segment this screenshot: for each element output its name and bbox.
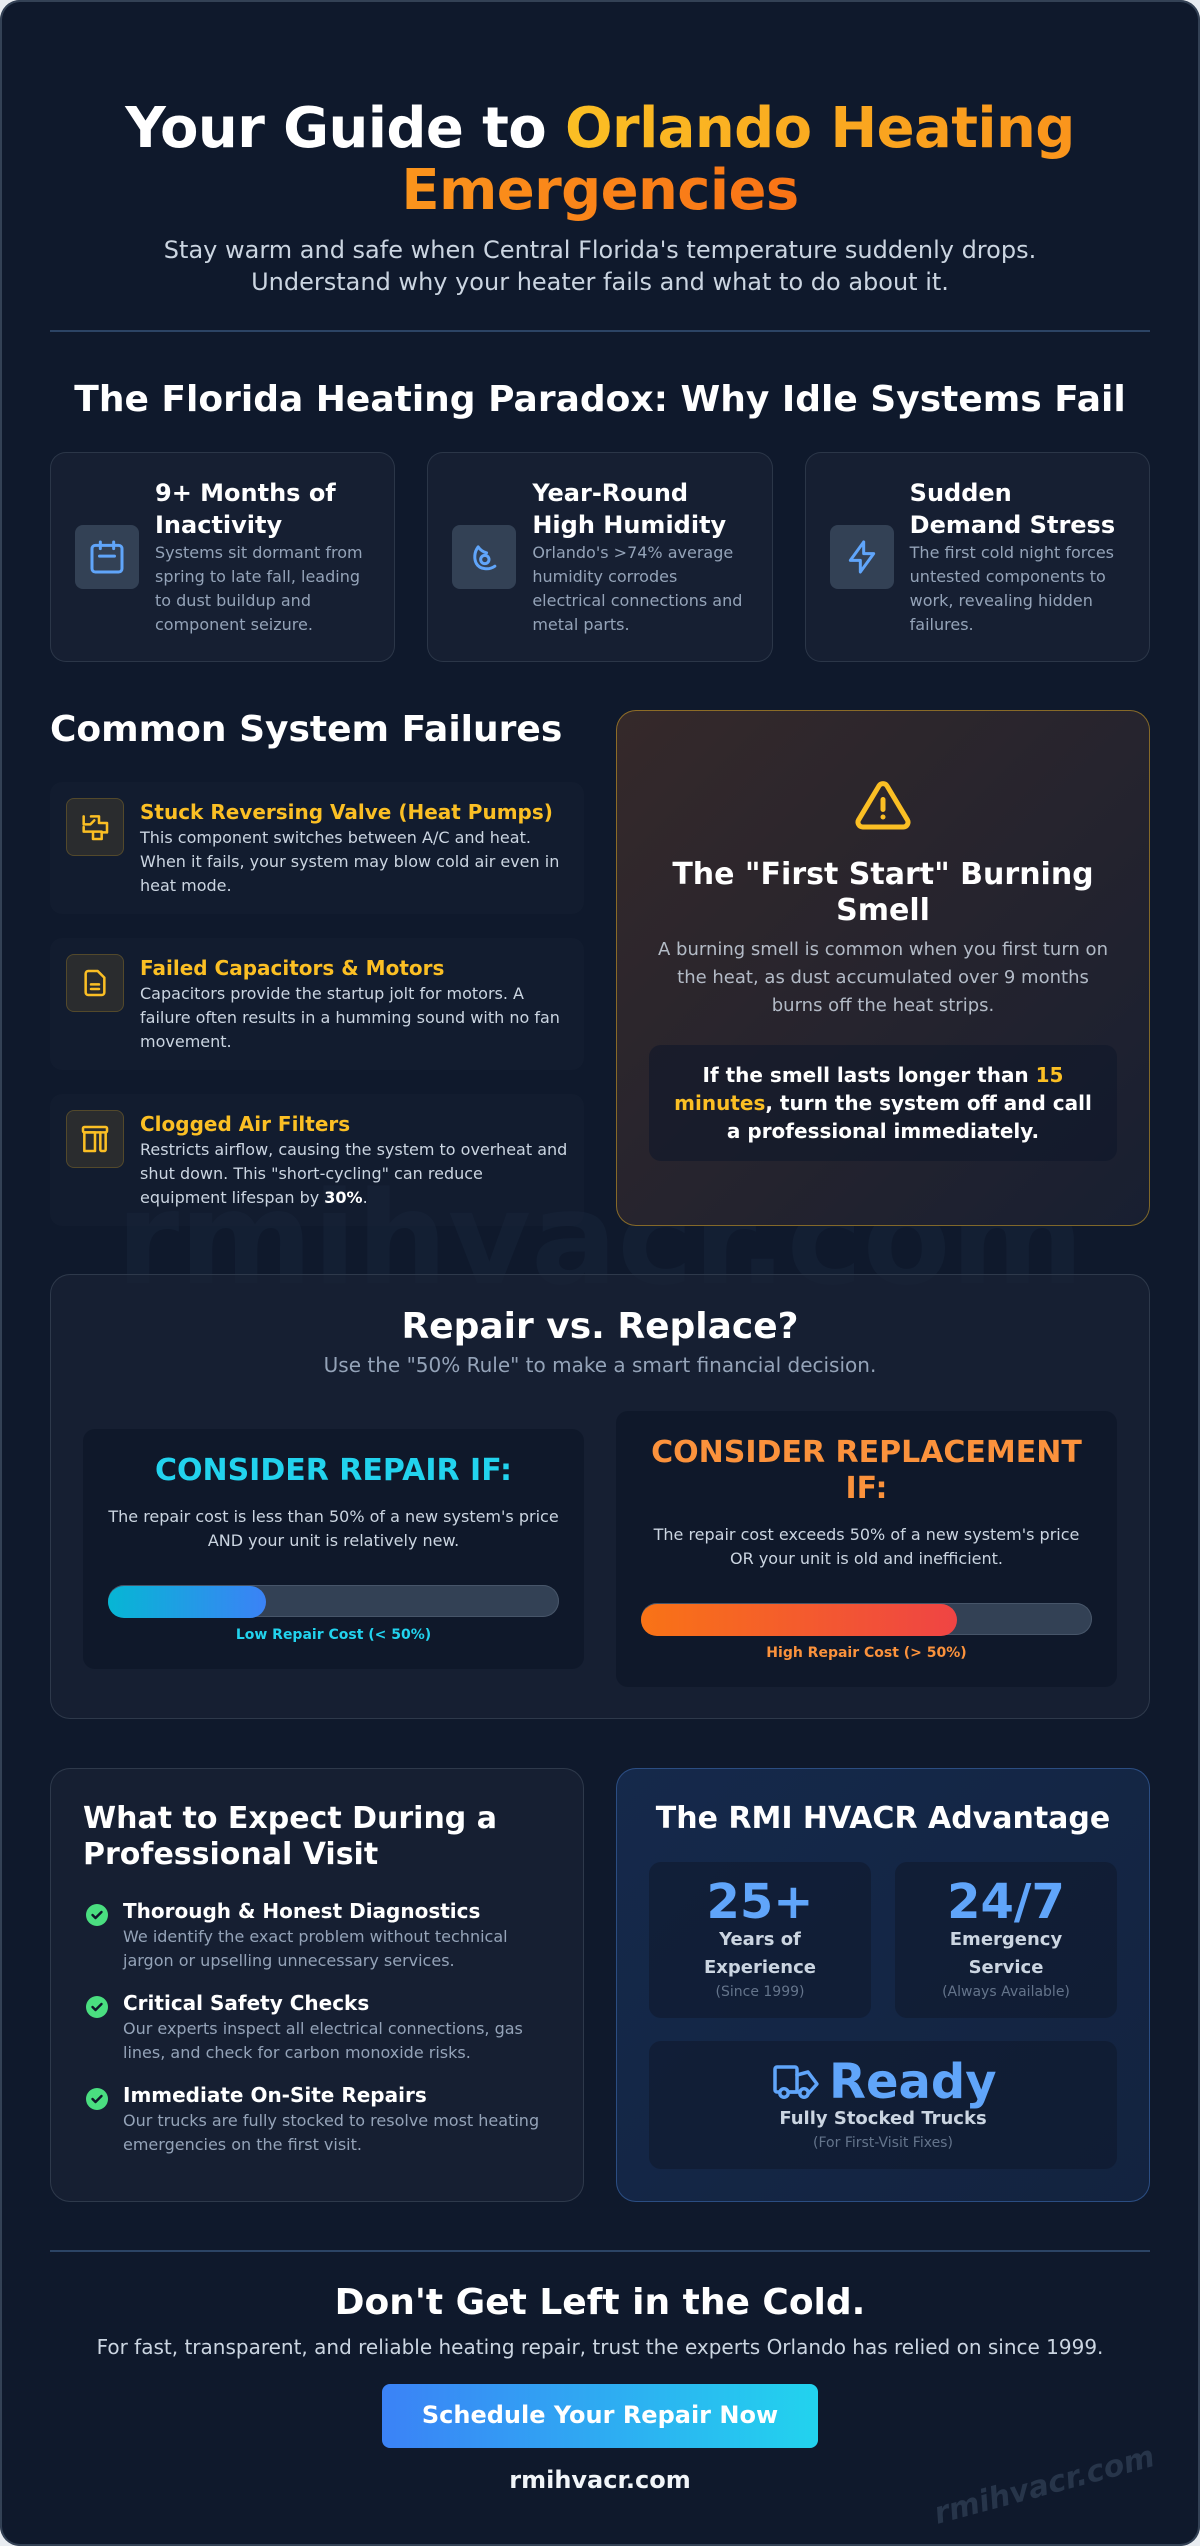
card title xyxy=(532,479,726,539)
item title: Stuck Reversing Valve (Heat Pumps) xyxy=(140,800,553,824)
check item 1 xyxy=(86,1899,508,1970)
column title: IF: xyxy=(845,1471,888,1506)
card text: metal parts. xyxy=(532,615,630,634)
item text: Capacitors provide the startup jolt for motors. A xyxy=(140,984,524,1003)
panel: repair vs replace xyxy=(50,1274,1150,1719)
item text: lines, and check for carbon monoxide risks. xyxy=(123,2043,471,2062)
subtitle: Understand why your heater fails and what to do about it. xyxy=(251,268,949,296)
icon: warning xyxy=(855,781,911,830)
item title: Immediate On-Site Repairs xyxy=(123,2083,427,2107)
label xyxy=(950,1929,1062,1978)
item text: Our experts inspect all electrical connections, gas xyxy=(123,2019,523,2038)
icon: check xyxy=(86,2088,108,2110)
card title: 9+ Months of xyxy=(155,479,336,507)
bar label: Low Repair Cost (< 50%) xyxy=(236,1627,431,1643)
item text xyxy=(122,1927,508,1970)
panel: advantage xyxy=(616,1768,1150,2202)
stat: ready xyxy=(649,2041,1117,2169)
stat: years xyxy=(649,1862,871,2018)
panel: burning smell xyxy=(616,710,1150,1226)
column text: The repair cost is less than 50% of a new system's price xyxy=(108,1507,559,1526)
panel title xyxy=(672,857,1094,928)
title: Emergencies xyxy=(401,158,799,223)
card text: failures. xyxy=(910,615,974,634)
item text: When it fails, your system may blow cold air even in xyxy=(140,852,559,871)
note: (Since 1999) xyxy=(716,1984,804,2000)
item text: equipment lifespan by 30%. xyxy=(140,1188,368,1207)
header xyxy=(124,96,1075,296)
item text: failure often results in a humming sound with no fan xyxy=(140,1008,560,1027)
number: 24/7 xyxy=(947,1874,1065,1930)
column: replace xyxy=(616,1411,1117,1687)
item title: Thorough & Honest Diagnostics xyxy=(123,1899,480,1923)
callout: If the smell lasts longer than 15 xyxy=(702,1063,1063,1087)
item text: We identify the exact problem without technical xyxy=(123,1927,508,1946)
item text xyxy=(140,828,559,895)
card text: humidity corrodes xyxy=(532,567,677,586)
label: Service xyxy=(969,1957,1043,1978)
item text: Restricts airflow, causing the system to overheat and xyxy=(140,1140,567,1159)
item text xyxy=(123,2019,523,2062)
column text xyxy=(654,1525,1079,1568)
card title xyxy=(910,479,1115,539)
icon: check xyxy=(86,1996,108,2018)
label: Years of xyxy=(719,1929,801,1950)
card text: electrical connections and xyxy=(532,591,742,610)
panel: humidity card xyxy=(427,452,773,662)
item text: movement. xyxy=(140,1032,232,1051)
heading: paradox: The Florida Heating Paradox: Why Idle Systems Fail xyxy=(74,379,1126,420)
card title: Sudden xyxy=(910,479,1012,507)
column text: The repair cost exceeds 50% of a new system's price xyxy=(654,1525,1079,1544)
panel title: The "First Start" Burning xyxy=(672,857,1094,892)
card text: component seizure. xyxy=(155,615,313,634)
card text: spring to late fall, leading xyxy=(155,567,360,586)
title xyxy=(124,96,1075,223)
card title: Demand Stress xyxy=(910,511,1115,539)
column text: AND your unit is relatively new. xyxy=(208,1531,459,1550)
subtitle xyxy=(164,236,1036,296)
panel text xyxy=(658,939,1108,1016)
panel: inactivity card xyxy=(50,452,395,662)
button xyxy=(382,2384,818,2448)
column title xyxy=(651,1435,1082,1506)
item title: Critical Safety Checks xyxy=(123,1991,369,2015)
note: (Always Available) xyxy=(942,1984,1070,2000)
column title: CONSIDER REPLACEMENT xyxy=(651,1435,1082,1470)
column text: OR your unit is old and inefficient. xyxy=(730,1549,1003,1568)
icon: humidity xyxy=(452,525,516,589)
icon: file xyxy=(66,954,124,1012)
panel subtitle: Use the "50% Rule" to make a smart financial decision. xyxy=(324,1353,876,1377)
item text: heat mode. xyxy=(140,876,232,895)
item text: jargon or upselling unnecessary services. xyxy=(123,1951,455,1970)
number: 25+ xyxy=(706,1874,814,1930)
footer text: For fast, transparent, and reliable heating repair, trust the experts Orlando has relied on since 1999. xyxy=(97,2335,1103,2359)
item text xyxy=(140,1140,567,1207)
card text: The first cold night forces xyxy=(910,543,1114,562)
icon: truck xyxy=(773,2065,819,2099)
card title xyxy=(155,479,336,539)
icon: calendar xyxy=(75,525,139,589)
icon: check xyxy=(86,1904,108,1926)
column title: CONSIDER REPAIR IF: xyxy=(155,1453,512,1488)
label: Emergency xyxy=(950,1929,1062,1950)
bar label: High Repair Cost (> 50%) xyxy=(766,1645,967,1661)
panel title: The RMI HVACR Advantage xyxy=(656,1801,1110,1836)
panel: demand stress card xyxy=(805,452,1150,662)
icon: filter xyxy=(66,1110,124,1168)
card title: Inactivity xyxy=(155,511,282,539)
card text xyxy=(155,543,363,634)
card text: work, revealing hidden xyxy=(910,591,1093,610)
label xyxy=(704,1929,816,1978)
check item 3 xyxy=(86,2083,539,2154)
callout xyxy=(649,1045,1117,1161)
card text xyxy=(910,543,1114,634)
panel title: What to Expect During a xyxy=(83,1801,497,1836)
watermark: corner: rmihvacr.com xyxy=(930,2439,1158,2532)
panel text: burns off the heat strips. xyxy=(772,995,994,1016)
panel text: the heat, as dust accumulated over 9 months xyxy=(677,967,1089,988)
number: Ready xyxy=(829,2054,997,2110)
button: Schedule Your Repair Now xyxy=(422,2401,778,2429)
item title: Clogged Air Filters xyxy=(140,1112,350,1136)
heading: common failures: Common System Failures xyxy=(50,709,562,750)
panel title: Repair vs. Replace? xyxy=(401,1306,799,1347)
card text: to dust buildup and xyxy=(155,591,311,610)
card text xyxy=(532,543,742,634)
bar: high cost xyxy=(641,1603,1092,1635)
callout: minutes, turn the system off and call xyxy=(674,1091,1092,1115)
panel: capacitors xyxy=(50,938,584,1070)
card title: High Humidity xyxy=(532,511,726,539)
item text xyxy=(123,2111,539,2154)
item text: This component switches between A/C and heat. xyxy=(140,828,531,847)
item text: emergencies on the first visit. xyxy=(123,2135,362,2154)
panel: what to expect xyxy=(50,1768,584,2202)
footer heading: Don't Get Left in the Cold. xyxy=(335,2282,865,2323)
panel: reversing valve xyxy=(50,782,584,914)
panel title: Professional Visit xyxy=(83,1837,378,1872)
bar: low cost xyxy=(108,1585,559,1617)
column: repair xyxy=(83,1429,584,1669)
item text: Our trucks are fully stocked to resolve most heating xyxy=(123,2111,539,2130)
panel text: A burning smell is common when you first turn on xyxy=(658,939,1108,960)
callout: a professional immediately. xyxy=(727,1119,1039,1143)
icon: bolt xyxy=(830,525,894,589)
watermark: large centre: rmihvacr.com xyxy=(116,1165,1084,1314)
panel: air filters xyxy=(50,1094,584,1226)
card text: Orlando's >74% average xyxy=(532,543,733,562)
card text: untested components to xyxy=(910,567,1106,586)
stat: emergency xyxy=(895,1862,1117,2018)
icon: valve xyxy=(66,798,124,856)
subtitle: Stay warm and safe when Central Florida's temperature suddenly drops. xyxy=(164,236,1036,264)
label: Fully Stocked Trucks xyxy=(779,2108,987,2129)
column text xyxy=(108,1507,559,1550)
title: Your Guide to Orlando Heating xyxy=(125,96,1075,161)
card title: Year-Round xyxy=(532,479,688,507)
item text xyxy=(140,984,560,1051)
label: Experience xyxy=(704,1957,816,1978)
panel title: Smell xyxy=(836,893,930,928)
check item 2 xyxy=(86,1991,523,2062)
item text: shut down. This "short-cycling" can reduce xyxy=(140,1164,483,1183)
website: rmihvacr.com xyxy=(509,2466,691,2494)
note: (For First-Visit Fixes) xyxy=(813,2135,953,2151)
card text: Systems sit dormant from xyxy=(155,543,363,562)
panel title xyxy=(83,1801,497,1872)
item title: Failed Capacitors & Motors xyxy=(140,956,444,980)
